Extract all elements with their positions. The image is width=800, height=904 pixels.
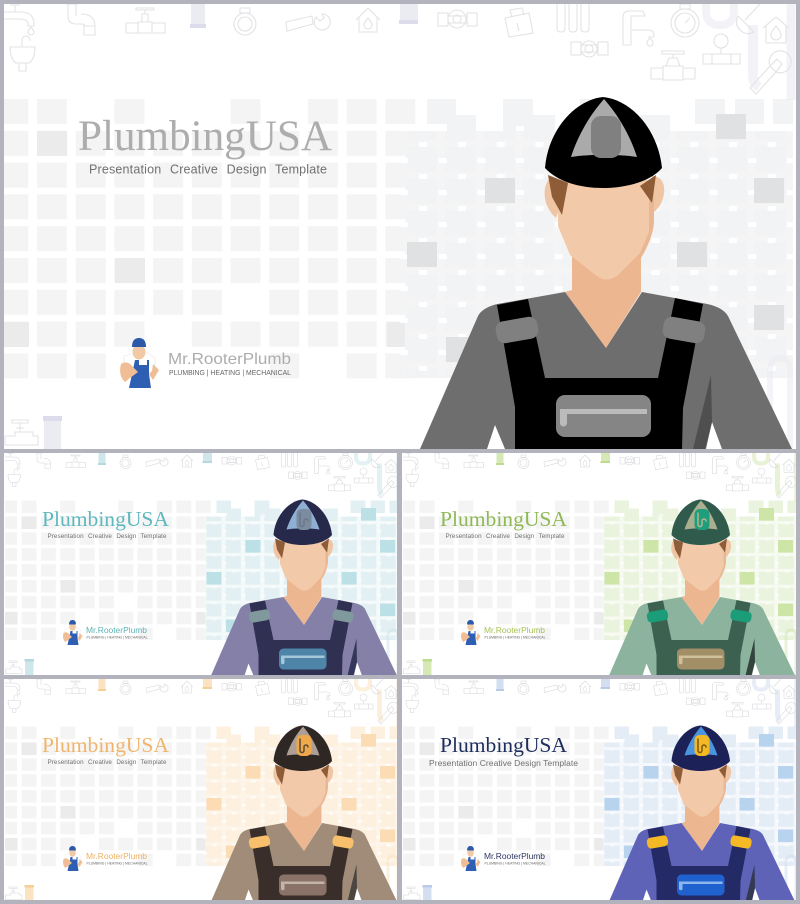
logo: Mr.RooterPlumb: PLUMBING | HEATING | MECHANICAL <box>484 862 546 866</box>
logo: Mr.RooterPlumb <box>63 846 148 871</box>
subtitle: Presentation Creative Design Template <box>48 759 167 766</box>
background: tile grid and plumbing icons <box>3 451 403 681</box>
panel: teal slide <box>4 453 397 675</box>
illustration: faceless plumber <box>609 500 795 676</box>
panel: blue slide <box>402 679 796 900</box>
subtitle: Presentation Creative Design Template <box>429 758 578 768</box>
logo: Mr.RooterPlumb: Mr.RooterPlumb <box>484 852 546 861</box>
logo: Mr.RooterPlumb: PLUMBING | HEATING | MECHANICAL <box>86 636 148 640</box>
title: PlumbingUSA <box>78 113 332 160</box>
logo: Mr.RooterPlumb: Mr.RooterPlumb <box>484 626 546 635</box>
subtitle: Presentation Creative Design Template <box>89 162 327 176</box>
logo: Mr.RooterPlumb <box>120 338 291 388</box>
illustration: faceless plumber <box>420 97 792 449</box>
background: tile grid and plumbing icons <box>3 677 403 904</box>
logo: Mr.RooterPlumb: Mr.RooterPlumb <box>86 852 148 861</box>
logo: Mr.RooterPlumb <box>63 620 148 645</box>
title: PlumbingUSA <box>42 507 169 531</box>
logo: Mr.RooterPlumb: Mr.RooterPlumb <box>86 626 148 635</box>
title: PlumbingUSA <box>440 507 567 531</box>
background: tile grid and plumbing icons <box>401 677 800 904</box>
illustration: faceless plumber <box>211 500 397 676</box>
logo: Mr.RooterPlumb: PLUMBING | HEATING | MECHANICAL <box>484 636 546 640</box>
logo: Mr.RooterPlumb: PLUMBING | HEATING | MECHANICAL <box>169 370 291 377</box>
panel: green slide <box>402 453 796 675</box>
illustration: faceless plumber <box>609 726 795 902</box>
background: tile grid and plumbing icons <box>401 451 800 681</box>
logo: Mr.RooterPlumb <box>461 846 546 871</box>
subtitle: Presentation Creative Design Template <box>446 533 565 540</box>
panel: main slide (grey) <box>4 4 796 449</box>
illustration: faceless plumber <box>211 726 397 902</box>
logo: Mr.RooterPlumb: Mr.RooterPlumb <box>168 351 291 368</box>
subtitle: Presentation Creative Design Template <box>48 533 167 540</box>
panel: orange slide <box>4 679 397 900</box>
logo: Mr.RooterPlumb: PLUMBING | HEATING | MECHANICAL <box>86 862 148 866</box>
background: tile grid and plumbing icons <box>0 0 800 460</box>
logo: Mr.RooterPlumb <box>461 620 546 645</box>
title: PlumbingUSA <box>42 733 169 757</box>
title: PlumbingUSA <box>440 733 567 757</box>
